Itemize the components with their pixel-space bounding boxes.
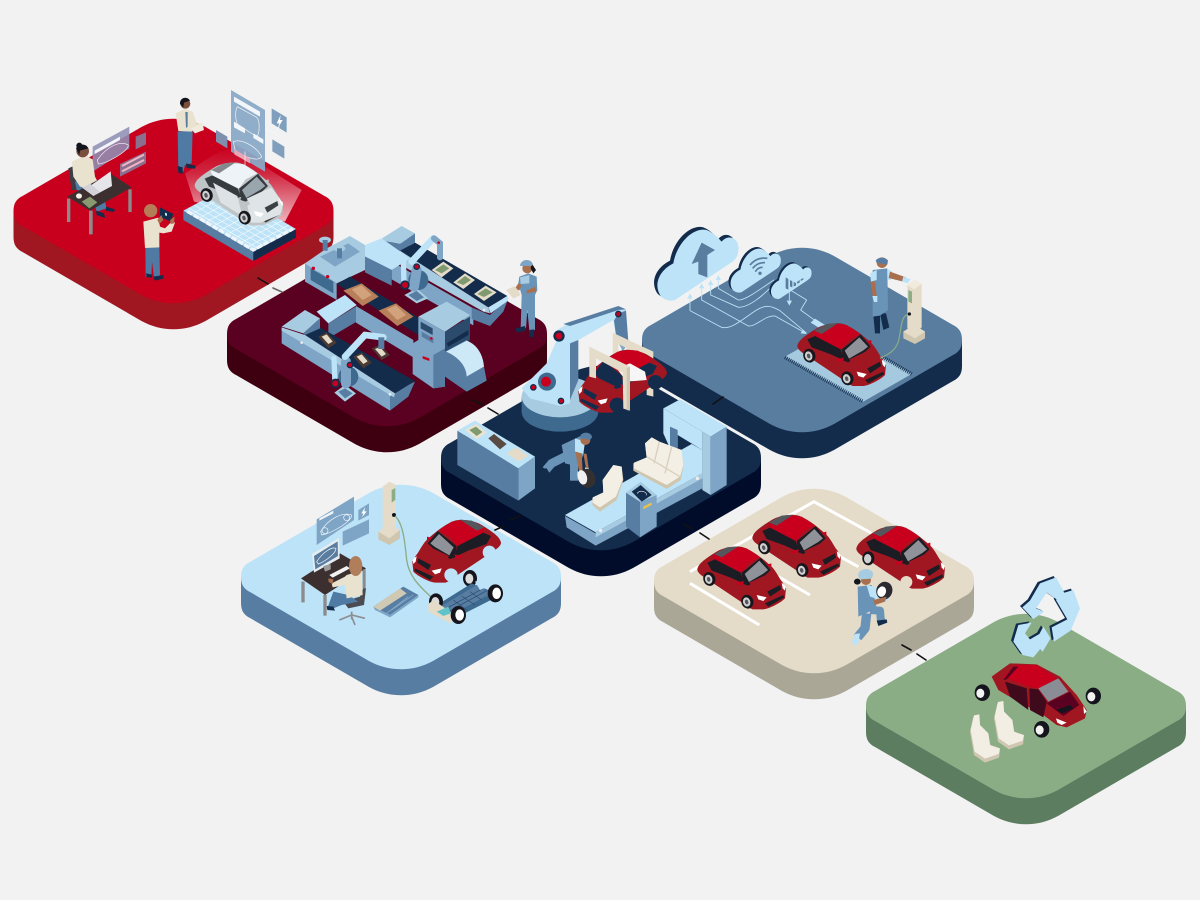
parked car three without front wheel [856, 526, 945, 589]
bar chart cloud [769, 262, 812, 299]
robot arm upper [400, 238, 440, 303]
seat conveyor gate [663, 399, 727, 495]
large upload cloud [654, 227, 738, 301]
red car shell [412, 520, 501, 583]
parking lines [690, 502, 872, 625]
charging station [378, 482, 400, 545]
platform: maroon production stage [227, 242, 547, 452]
single seat [592, 465, 623, 512]
left hologram panels [93, 127, 146, 177]
connector dashes between platforms [258, 278, 926, 660]
scanner gate and hood [413, 302, 487, 392]
bench seat [633, 437, 683, 489]
worker carrying tire [852, 569, 895, 646]
worker with clipboard [506, 260, 537, 337]
hologram table [183, 188, 296, 261]
car shell in cream frame [578, 333, 667, 413]
assembly robot [522, 306, 630, 432]
charging pad [785, 329, 912, 402]
loose wheels [975, 684, 1101, 738]
platform: steel blue connected stage [642, 248, 962, 458]
worker at charger [870, 257, 911, 333]
control pedestal [626, 482, 657, 537]
design panels [317, 497, 369, 546]
worker lifting tire [543, 433, 598, 490]
platform: navy assembly stage [441, 366, 761, 576]
seat conveyor belt [565, 444, 702, 546]
battery pack [373, 587, 418, 617]
scene: recycling on green platform [970, 576, 1101, 763]
scene: parking lot on beige platform [690, 502, 945, 646]
car body skeleton [992, 663, 1087, 727]
scene: design studio on red platform [67, 90, 302, 281]
scene: final assembly on navy platform [457, 306, 727, 546]
recycling symbol [1011, 576, 1080, 657]
cable [395, 516, 440, 607]
platform: beige parking stage [654, 489, 974, 699]
woman at desk with laptop [67, 143, 132, 234]
wifi cloud [729, 247, 781, 293]
parts counter [457, 421, 535, 501]
upper conveyor with circuit boards [379, 226, 508, 326]
data lines [687, 275, 825, 334]
platform: light blue electrification stage [241, 485, 561, 695]
platform: red design stage [14, 119, 334, 329]
scene: EV design and battery on light blue platform [301, 482, 503, 625]
platform: green recycling stage [866, 614, 1186, 824]
chassis with wheels [428, 570, 503, 624]
hologram glow [185, 147, 302, 222]
silver concept car [195, 162, 283, 226]
parked car two [752, 515, 841, 579]
charging station with cable [880, 280, 925, 358]
man with tablet [143, 204, 175, 281]
hologram blueprint panels [216, 90, 287, 172]
man presenting [176, 98, 204, 174]
parked car one [697, 546, 786, 610]
scene: factory conveyors on maroon platform [282, 226, 537, 411]
central conveyor with parcels [328, 277, 457, 357]
red car charging [797, 323, 886, 387]
lower conveyor with robot arm [282, 295, 415, 411]
recycled seats [970, 701, 1024, 763]
robot arm lower [331, 335, 384, 402]
oven machine [305, 236, 410, 300]
scene: connected car charging on steel platform [654, 227, 925, 402]
designer on chair [327, 556, 366, 625]
desk and monitor [301, 538, 366, 616]
